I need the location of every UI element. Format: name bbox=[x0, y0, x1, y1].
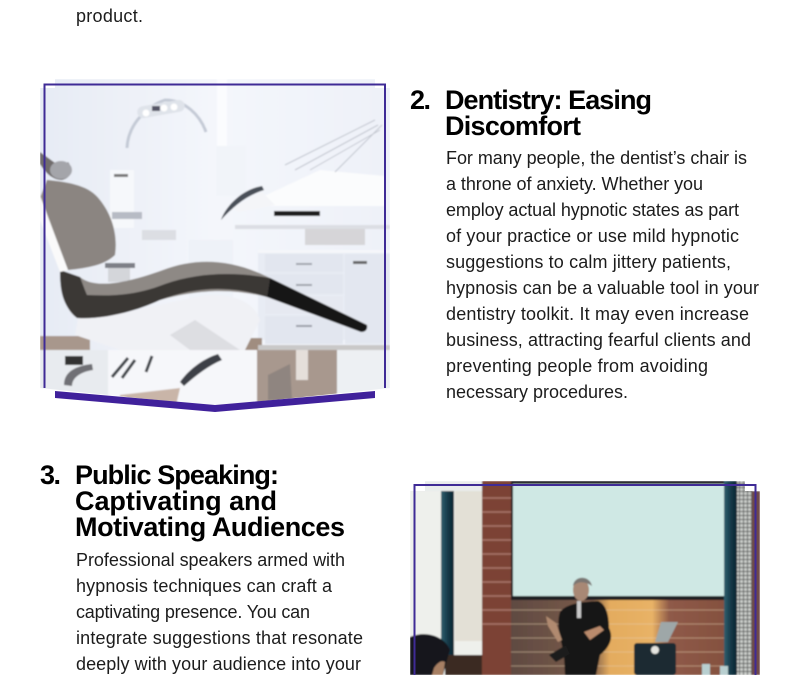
photo: speaker on stage with purple frame bbox=[410, 481, 760, 675]
heading: dentistry: Discomfort bbox=[445, 111, 581, 141]
text block: dentistry: suggestions to calm jittery patients, bbox=[446, 252, 731, 272]
instrument tray bbox=[262, 170, 385, 206]
text block: dentistry: necessary procedures. bbox=[446, 382, 628, 402]
laptop and barrel bbox=[655, 622, 678, 642]
bottles bbox=[702, 664, 710, 675]
text: end of previous section: product. bbox=[76, 6, 143, 26]
text block: public speaking: Professional speakers armed with bbox=[76, 550, 345, 570]
text block: dentistry bbox=[446, 148, 759, 402]
purple base band bbox=[55, 391, 375, 412]
stool bbox=[105, 263, 135, 268]
floor bbox=[40, 336, 90, 350]
text block: public speaking: integrate suggestions that resonate bbox=[76, 628, 363, 648]
heading: dentistry bbox=[445, 85, 652, 141]
text block: dentistry: dentistry toolkit. It may even increase bbox=[446, 304, 749, 324]
chair seat bbox=[69, 260, 270, 318]
speaker bbox=[558, 601, 611, 675]
lower brick wall bbox=[511, 600, 725, 675]
wall unit bbox=[110, 170, 130, 228]
chair base bbox=[78, 335, 252, 351]
text block: public speaking: hypnosis techniques can craft a bbox=[76, 576, 333, 596]
frame bbox=[44, 84, 385, 388]
number 2: 2. bbox=[410, 85, 431, 115]
text block: dentistry: a throne of anxiety. Whether you bbox=[446, 174, 703, 194]
lamp arm bbox=[127, 100, 206, 148]
text block: dentistry: business, attracting fearful clients and bbox=[446, 330, 751, 350]
text block: dentistry: For many people, the dentist’s chair is bbox=[446, 148, 747, 168]
right pole and mesh bbox=[724, 481, 737, 675]
photo: dentist chair with purple frame bbox=[38, 79, 390, 412]
heading: public speaking: Public Speaking: bbox=[75, 460, 279, 490]
text block: dentistry: preventing people from avoiding bbox=[446, 356, 708, 376]
brick column bbox=[482, 481, 511, 675]
chair back bbox=[40, 180, 116, 270]
headrest bbox=[40, 152, 71, 180]
heading: dentistry: Dentistry: Easing bbox=[445, 85, 652, 115]
cabinet bbox=[258, 254, 266, 339]
text block: public speaking: captivating presence. You can bbox=[76, 602, 310, 622]
audience head bbox=[410, 634, 450, 675]
text block: dentistry: employ actual hypnotic states as part bbox=[446, 200, 739, 220]
number 3: 3. bbox=[40, 460, 61, 490]
text block: dentistry: of your practice or use mild hypnotic bbox=[446, 226, 739, 246]
heading: public speaking: Motivating Audiences bbox=[75, 512, 345, 542]
curtain bbox=[410, 491, 482, 675]
text block: dentistry: hypnosis can be a valuable tool in your bbox=[446, 278, 759, 298]
text block: public speaking bbox=[76, 550, 363, 674]
text block: public speaking: deeply with your audience into your bbox=[76, 654, 361, 674]
heading: public speaking: Captivating and bbox=[75, 486, 277, 516]
heading: public speaking bbox=[75, 460, 345, 542]
screen bbox=[511, 481, 725, 600]
frame bbox=[414, 485, 756, 675]
bottom strip photos bbox=[108, 350, 137, 396]
